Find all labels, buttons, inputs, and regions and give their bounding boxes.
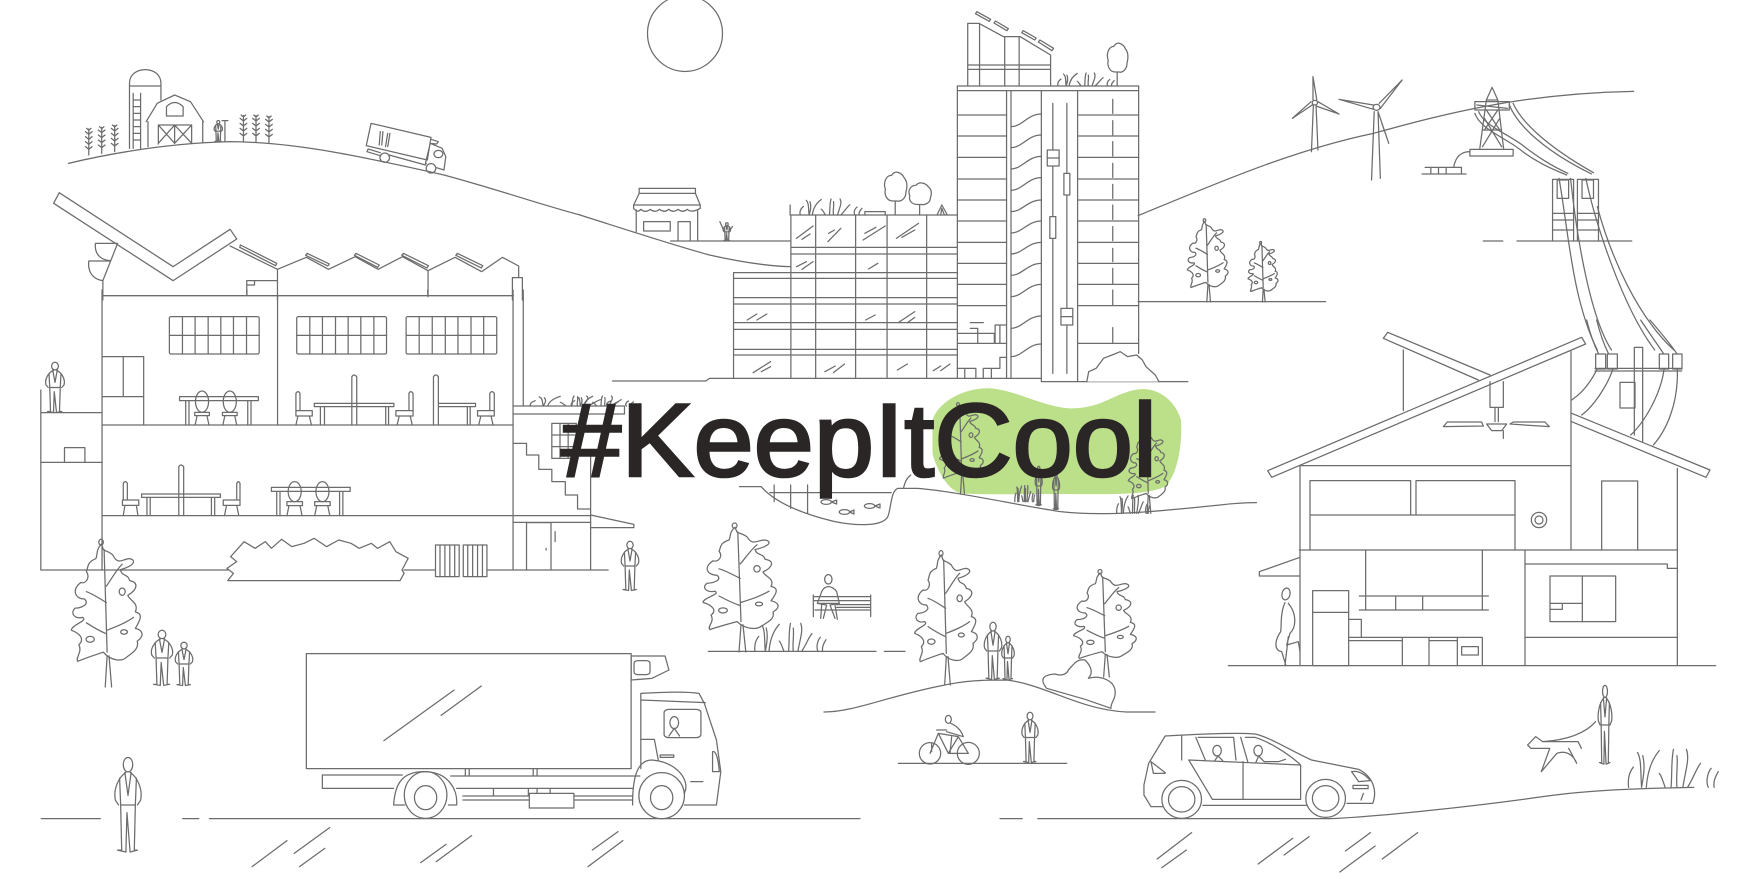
- people: [46, 362, 1612, 852]
- outdoor AC units: [436, 545, 487, 577]
- factory roof: [54, 193, 522, 300]
- factory building cross-section: [41, 290, 634, 581]
- park scene with bench, hill, bush and cyclist: [708, 575, 1155, 764]
- hedge: [227, 538, 408, 581]
- person by house: [1276, 587, 1300, 666]
- office tower and podium building: [613, 12, 1188, 382]
- wind turbines: [1292, 77, 1402, 180]
- title: #KeepItCool: [561, 383, 1157, 499]
- park trees: [71, 219, 1278, 687]
- farm hill with barn, silo, crops and delivery truck: [68, 70, 580, 215]
- car, road and dog walker: [1000, 722, 1718, 872]
- pond, riverbank and people behind the title: [739, 403, 1256, 525]
- corner shop and hill: [580, 188, 790, 267]
- canteen tables and chairs: [122, 375, 494, 516]
- hill with wind turbines, pylon and cables: [1138, 77, 1674, 350]
- cyclist: [919, 715, 979, 764]
- factory windows: [169, 317, 497, 354]
- bench with seated person: [813, 575, 871, 619]
- refrigerated truck: [41, 654, 860, 867]
- sun: [648, 0, 722, 72]
- ceiling fan: [1443, 382, 1549, 438]
- green highlight blob: [932, 388, 1181, 494]
- bush on hill: [1043, 660, 1115, 708]
- house cross-section: [1228, 320, 1716, 666]
- dog and leash: [1528, 722, 1596, 772]
- pylon: [1422, 87, 1593, 175]
